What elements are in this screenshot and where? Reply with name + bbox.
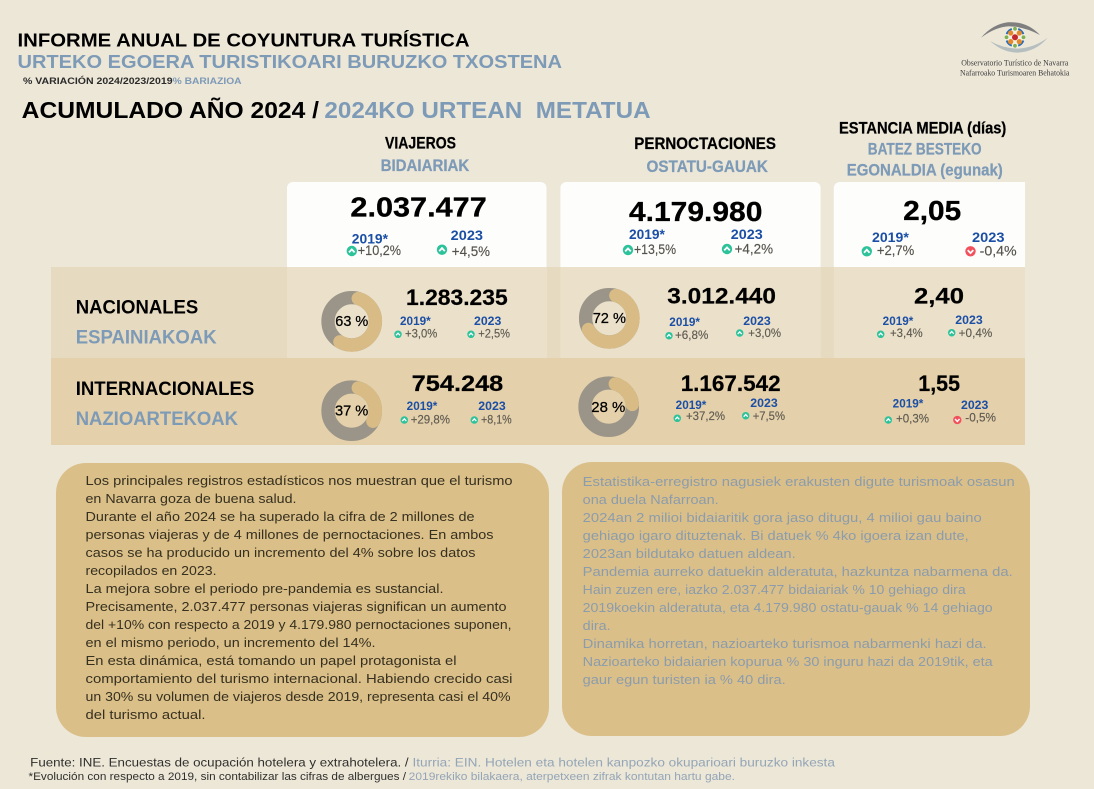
- stat: estancia internacionales: +0,3%: [896, 414, 929, 426]
- panel: text in Basque: 2019koekin alderatuta, eta 4.179.980 ostatu-gauak % 14 gehiago: [583, 600, 993, 615]
- row label: internacionales: INTERNACIONALES: [76, 378, 254, 400]
- card: estancia media total: [834, 182, 1025, 267]
- stat: viajeros nacionales: [394, 285, 510, 341]
- card: viajeros total: [287, 182, 546, 267]
- panel: text in Spanish: personas viajeras y de 4 millones de pernoctaciones. En ambos: [86, 527, 494, 542]
- stat: viajeros nacionales: 1.283.235: [406, 285, 508, 310]
- stat: viajeros internacionales: +8,1%: [481, 414, 512, 426]
- card: viajeros total: 2023: [451, 227, 483, 243]
- card: pernoctaciones total: 4.179.980: [629, 196, 762, 227]
- stat: viajeros internacionales: 2023: [478, 401, 506, 413]
- donut: viajeros nacionales 63 %: [322, 292, 381, 351]
- stat: pernoctaciones internacionales: 1.167.542: [681, 371, 781, 396]
- stat: pernoctaciones internacionales: 2023: [750, 398, 778, 410]
- logo: Nafarroako Turismoaren Behatokia: [960, 69, 1070, 78]
- card: viajeros total: +4,5%: [452, 243, 490, 259]
- stat: pernoctaciones internacionales: 2019*: [676, 400, 707, 412]
- stat: pernoctaciones internacionales: [674, 371, 785, 423]
- source note: Fuente: INE. Encuestas de ocupación hotelera y extrahotelera. /: [30, 756, 409, 770]
- card: viajeros total: 2.037.477: [350, 192, 487, 223]
- card: pernoctaciones total: [560, 182, 821, 267]
- panel: text in Spanish: Precisamente, 2.037.477 personas viajeras significan un aumento: [86, 599, 507, 614]
- logo: Observatorio Turístico de Navarra: [961, 58, 1069, 67]
- card: pernoctaciones total: 2019*: [629, 226, 665, 242]
- donut: pernoctaciones nacionales 72 %: 72 %: [593, 310, 626, 327]
- stat: viajeros internacionales: [401, 371, 512, 426]
- heading: accumulated year: ACUMULADO AÑO 2024 /: [22, 96, 320, 123]
- stat: viajeros nacionales: +3,0%: [405, 329, 437, 341]
- title: URTEKO EGOERA TURISTIKOARI BURUZKO TXOSTENA: [18, 51, 562, 72]
- source note: Iturria: EIN. Hotelen eta hotelen kanpozko okuparioari buruzko inkesta: [412, 756, 835, 770]
- column heading: pernoctaciones: OSTATU-GAUAK: [646, 157, 769, 176]
- column heading: estancia media: BATEZ BESTEKO: [868, 139, 982, 158]
- panel: text in Basque: dira.: [583, 618, 611, 633]
- stat: viajeros internacionales: 2019*: [407, 401, 438, 413]
- heading: accumulated year: [22, 96, 651, 123]
- stat: estancia internacionales: 2019*: [893, 399, 924, 411]
- card: estancia media total: -0,4%: [980, 243, 1017, 259]
- subtitle: variation: [23, 75, 242, 86]
- donut: viajeros internacionales 37 %: [322, 381, 381, 440]
- donut: viajeros internacionales 37 %: 37 %: [335, 403, 368, 420]
- footnote: *Evolución con respecto a 2019, sin contabilizar las cifras de albergues /: [28, 771, 406, 783]
- stat: estancia internacionales: [885, 371, 996, 426]
- stat: estancia nacionales: +0,4%: [959, 328, 992, 340]
- stat: viajeros internacionales: +29,8%: [411, 414, 450, 426]
- panel: text in Spanish: en el mismo periodo, un incremento del 14%.: [86, 635, 376, 650]
- panel: text in Basque: ona duela Nafarroan.: [583, 492, 719, 507]
- card: estancia media total: 2019*: [872, 229, 909, 245]
- row band: nacionales: [51, 267, 1025, 358]
- panel: text in Spanish: comportamiento del turismo internacional. Habiendo crecido casi: [86, 671, 513, 686]
- stat: estancia nacionales: [877, 283, 992, 340]
- stat: estancia nacionales: 2,40: [914, 283, 964, 308]
- stat: estancia nacionales: 2023: [955, 315, 983, 327]
- panel: text in Spanish: recopilados en 2023.: [86, 563, 216, 578]
- card: pernoctaciones total: +13,5%: [634, 241, 676, 257]
- stat: pernoctaciones internacionales: +37,2%: [686, 411, 725, 423]
- stat: pernoctaciones nacionales: 3.012.440: [667, 283, 776, 308]
- card: viajeros total: 2019*: [352, 230, 389, 246]
- panel: text in Basque: 2023an bildutako datuen aldean.: [583, 546, 796, 561]
- row label: nacionales: [76, 296, 217, 348]
- panel: text in Basque: [562, 462, 1030, 736]
- stat: pernoctaciones nacionales: +3,0%: [748, 328, 781, 340]
- stat: pernoctaciones internacionales: +7,5%: [753, 411, 785, 423]
- card: estancia media total: +2,7%: [877, 242, 914, 258]
- panel: text in Spanish: La mejora sobre el periodo pre-pandemia es sustancial.: [86, 581, 444, 596]
- column heading: estancia media: EGONALDIA (egunak): [847, 160, 1003, 179]
- donut: pernoctaciones nacionales 72 %: [580, 289, 639, 348]
- panel: text in Basque: Pandemia aurreko datuekin alderatuta, hazkuntza nabarmena da.: [583, 564, 1013, 579]
- column heading: pernoctaciones: [634, 134, 776, 176]
- stat: estancia internacionales: 2023: [961, 400, 988, 412]
- column heading: viajeros: [381, 134, 470, 175]
- donut: viajeros nacionales 63 %: 63 %: [335, 313, 368, 330]
- column heading: estancia media: [839, 118, 1006, 179]
- column heading: viajeros: VIAJEROS: [385, 134, 456, 152]
- stat: pernoctaciones nacionales: +6,8%: [675, 330, 708, 342]
- title: [18, 30, 562, 72]
- footnote: 2019rekiko bilakaera, aterpetxeen zifrak kontutan hartu gabe.: [409, 771, 735, 783]
- stat: pernoctaciones nacionales: 2019*: [669, 317, 701, 329]
- stat: viajeros internacionales: 754.248: [412, 371, 503, 396]
- footnote: [28, 771, 735, 783]
- panel: text in Basque: 2024an 2 milioi bidaiaritik gora jaso ditugu, 4 milioi gau baino: [583, 510, 982, 525]
- panel: text in Spanish: del turismo actual.: [86, 707, 206, 722]
- panel: text in Spanish: [56, 463, 549, 737]
- card: estancia media total: 2,05: [903, 195, 961, 226]
- panel: text in Spanish: en Navarra goza de buena salud.: [86, 491, 296, 506]
- stat: estancia nacionales: +3,4%: [890, 328, 923, 340]
- subtitle: variation: % BARIAZIOA: [173, 76, 242, 86]
- panel: text in Basque: Hain zuzen ere, iazko 2.037.477 bidaiariak % 10 gehiago dira: [583, 582, 966, 597]
- row band: internacionales: [51, 358, 1025, 445]
- row label: internacionales: [76, 378, 254, 430]
- card: pernoctaciones total: 2023: [731, 226, 763, 242]
- stat: pernoctaciones nacionales: [665, 283, 781, 342]
- stat: pernoctaciones nacionales: 2023: [743, 316, 771, 328]
- column heading: estancia media: ESTANCIA MEDIA (días): [839, 118, 1006, 137]
- panel: text in Basque: gehiago igaro dituztenak. Bi datuek % 4ko igoera izan dute,: [583, 528, 969, 543]
- title: INFORME ANUAL DE COYUNTURA TURÍSTICA: [18, 30, 470, 51]
- stat: viajeros nacionales: 2019*: [400, 316, 431, 328]
- source note: [30, 756, 835, 770]
- donut: pernoctaciones internacionales 28 %: 28 %: [591, 399, 625, 416]
- stat: viajeros nacionales: +2,5%: [478, 329, 510, 341]
- panel: text in Basque: Estatistika-erregistro nagusiek erakusten digute turismoak osasun: [583, 474, 1015, 489]
- donut: pernoctaciones internacionales 28 %: [579, 377, 638, 436]
- stat: estancia internacionales: -0,5%: [965, 413, 996, 425]
- logo: [960, 22, 1070, 78]
- panel: text in Spanish: casos se ha producido un incremento del 4% sobre los datos: [86, 545, 476, 560]
- stat: estancia internacionales: 1,55: [918, 371, 960, 396]
- card: viajeros total: +10,2%: [358, 242, 401, 258]
- panel: text in Basque: Dinamika horretan, nazioarteko turismoa nabarmenki hazi da.: [583, 636, 987, 651]
- column heading: viajeros: BIDAIARIAK: [381, 156, 470, 175]
- panel: text in Spanish: del +10% con respecto a 2019 y 4.179.980 pernoctaciones suponen,: [86, 617, 512, 632]
- stat: estancia nacionales: 2019*: [883, 316, 914, 328]
- column heading: pernoctaciones: PERNOCTACIONES: [634, 134, 776, 153]
- card: pernoctaciones total: +4,2%: [735, 240, 773, 256]
- panel: text in Spanish: Durante el año 2024 se ha superado la cifra de 2 millones de: [86, 509, 474, 524]
- heading: accumulated year: 2024KO URTEAN METATUA: [324, 97, 651, 123]
- row label: nacionales: ESPAINIAKOAK: [76, 326, 217, 348]
- panel: text in Spanish: un 30% su volumen de viajeros desde 2019, representa casi el 40%: [86, 689, 511, 704]
- panel: text in Spanish: En esta dinámica, está tomando un papel protagonista el: [86, 653, 457, 668]
- row label: nacionales: NACIONALES: [76, 296, 198, 318]
- stat: viajeros nacionales: 2023: [474, 316, 501, 328]
- card: estancia media total: 2023: [972, 229, 1005, 245]
- row label: internacionales: NAZIOARTEKOAK: [76, 408, 238, 430]
- panel: text in Basque: Nazioarteko bidaiarien kopurua % 30 inguru hazi da 2019tik, eta: [583, 654, 993, 669]
- subtitle: variation: % VARIACIÓN 2024/2023/2019: [23, 75, 173, 86]
- panel: text in Basque: gaur egun turisten ia % 40 dira.: [583, 672, 786, 687]
- panel: text in Spanish: Los principales registros estadísticos nos muestran que el turismo: [86, 473, 512, 488]
